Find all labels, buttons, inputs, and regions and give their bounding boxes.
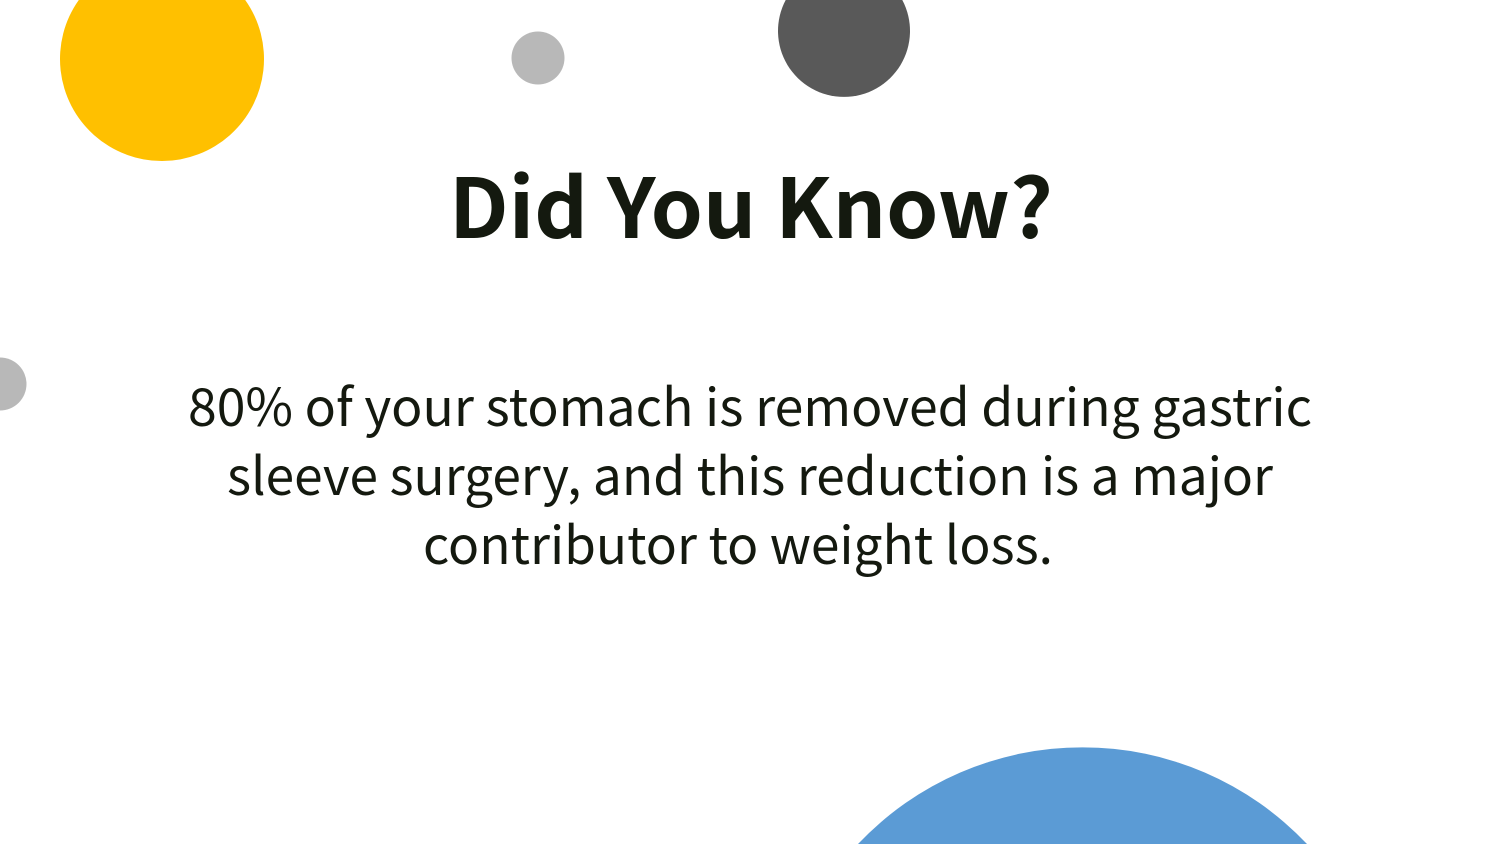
body line 1: 80% of your stomach is removed during gastric: [188, 366, 1312, 441]
left gray circle: [0, 358, 26, 410]
title: Did You Know?: [449, 143, 1053, 262]
blue circle: [858, 747, 1307, 844]
body line 3: contributor to weight loss.: [423, 504, 1053, 579]
body line 2: sleeve surgery, and this reduction is a major: [227, 435, 1274, 510]
body text: [188, 366, 1312, 579]
dark gray circle: [778, 0, 910, 97]
yellow circle: [60, 0, 264, 161]
small gray circle: [512, 32, 564, 84]
